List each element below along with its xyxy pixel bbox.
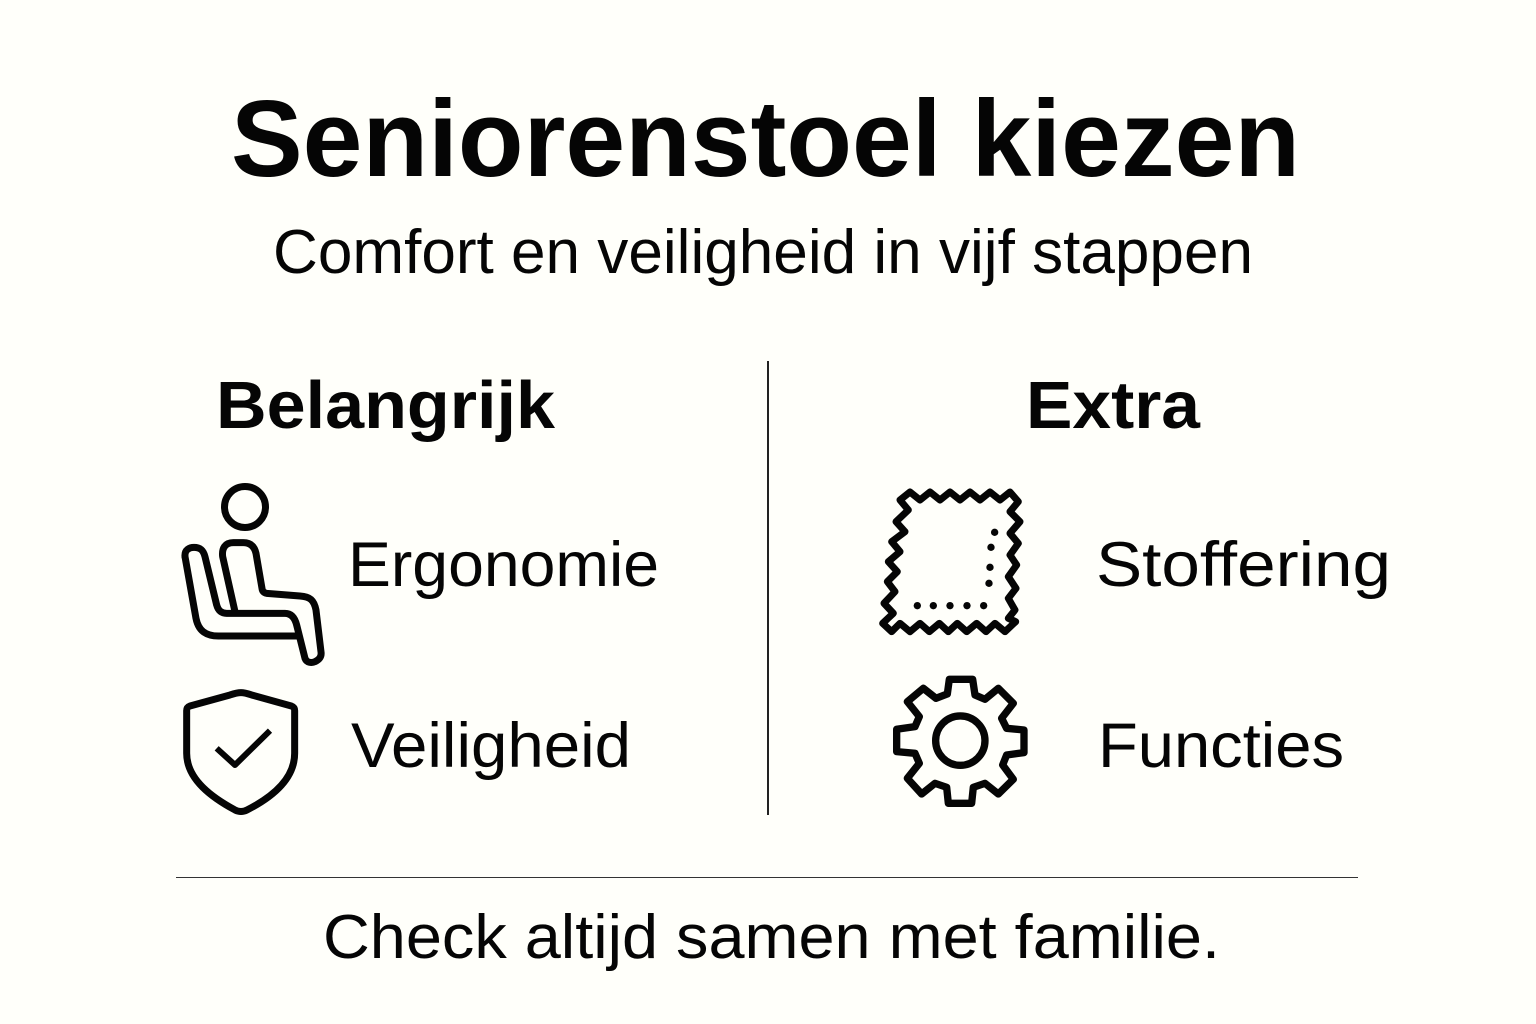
footer note: Check altijd samen met familie.: [323, 903, 1220, 972]
heading: Extra: Extra: [1026, 368, 1201, 443]
heading: Belangrijk: Belangrijk: [216, 368, 556, 443]
subtitle: Comfort en veiligheid in vijf stappen: [273, 218, 1253, 287]
icon: gear: [897, 679, 1024, 803]
icon: fabric swatch: [883, 492, 1020, 632]
label: Stoffering: Stoffering: [1096, 530, 1391, 600]
label: Veiligheid: Veiligheid: [351, 711, 631, 781]
label: Ergonomie: Ergonomie: [348, 530, 659, 600]
icon: person seated in chair: [185, 486, 321, 662]
title: Seniorenstoel kiezen: [231, 78, 1300, 200]
label: Functies: Functies: [1098, 711, 1344, 781]
icon: shield with check: [187, 693, 295, 811]
